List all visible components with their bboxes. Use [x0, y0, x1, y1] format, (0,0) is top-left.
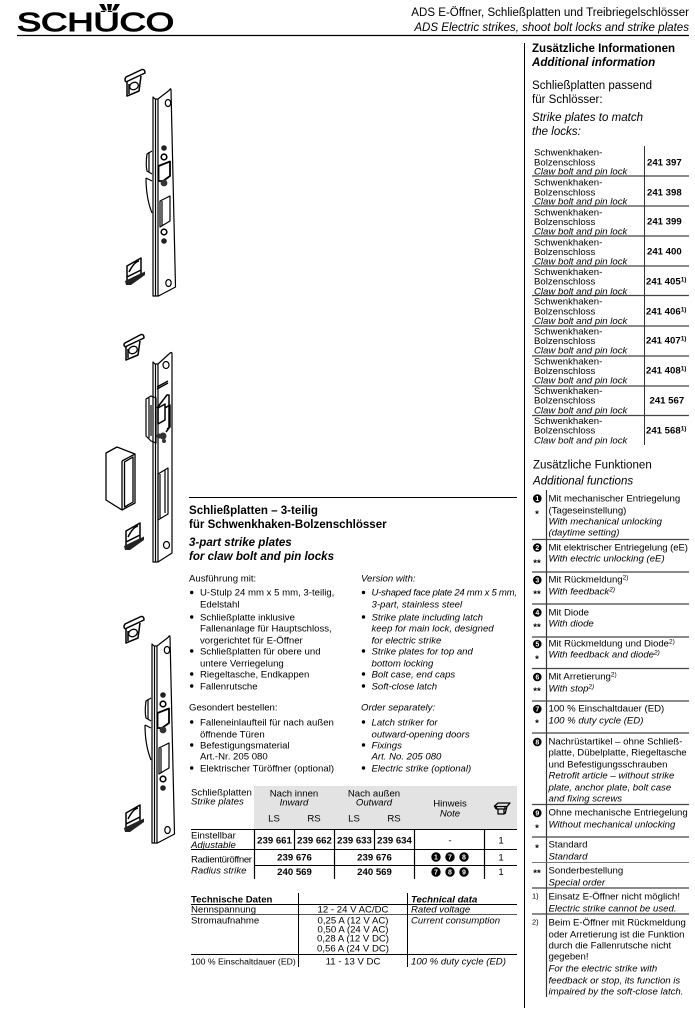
strike plates order table: 240 569 — [277, 867, 312, 878]
strike plates order table: Radius strike — [191, 866, 246, 876]
English version list: Bolt case, end caps — [372, 670, 455, 680]
column divider — [524, 43, 526, 1008]
lock compatibility table: Claw bolt and pin lock — [534, 226, 629, 238]
function 7: 100 % Einschaltdauer (ED) — [548, 704, 664, 714]
strike plates to match heading: Strike plates to match — [532, 112, 643, 124]
lock compatibility table: 241 408 — [646, 366, 681, 376]
illustration: strike plate set with electric strike and bolt case — [106, 334, 172, 562]
English version list: keep for main lock, designed — [372, 624, 494, 634]
lock compatibility table: Schwenkhaken- — [534, 356, 602, 368]
strike plates order table: Einstellbar — [191, 830, 237, 842]
technical data table: 0,50 A (24 V AC) — [318, 924, 388, 936]
German order separately list — [189, 702, 334, 774]
function 5 — [533, 638, 675, 665]
German version list — [189, 574, 334, 692]
lock compatibility table: Schwenkhaken- — [534, 296, 602, 308]
product panel rule — [189, 496, 517, 498]
lock compatibility table: Schwenkhaken- — [534, 178, 602, 188]
lock compatibility table: 241 567 — [650, 396, 684, 406]
Schüco logo: SCHÜCO — [17, 7, 174, 37]
function 3: 2) — [608, 586, 615, 594]
lock compatibility table: 241 568 — [646, 426, 681, 436]
German version list: untere Verriegelung — [200, 658, 284, 670]
lock compatibility table: 241 407 — [646, 336, 681, 346]
function 5: 5 — [535, 642, 539, 648]
function 2: ** — [533, 558, 541, 569]
German order separately list: Elektrischer Türöffner (optional) — [200, 764, 334, 774]
table header: RS — [307, 814, 321, 824]
table header: Note — [440, 808, 460, 820]
additional functions heading: Additional functions — [532, 476, 633, 488]
lock compatibility table: Schwenkhaken- — [534, 208, 602, 218]
table header: Nach innen — [270, 788, 318, 800]
function 6: Mit Arretierung — [548, 672, 611, 682]
lock compatibility table: 241 398 — [647, 188, 682, 198]
German version list: Fallenanlage für Hauptschloss, — [200, 624, 332, 634]
lock compatibility table: 1) — [681, 276, 686, 284]
strike plates to match heading: the locks: — [532, 126, 581, 138]
product heading: 3-part strike plates — [189, 537, 292, 549]
lock compatibility table: Claw bolt and pin lock — [534, 196, 629, 208]
function 3: Mit Rückmeldung — [548, 574, 623, 586]
page title: ADS E-Öffner, Schließplatten und Treibriegelschlösser — [411, 7, 689, 19]
German order separately list: Falleneinlaufteil für nach außen — [200, 718, 334, 728]
English version list: 3-part, stainless steel — [372, 600, 463, 610]
German order separately list: Befestigungsmaterial — [200, 740, 290, 752]
additional information heading: Additional information — [531, 57, 655, 69]
function 8: Retrofit article – without strike — [548, 770, 674, 782]
English order separately list: Electric strike (optional) — [372, 764, 471, 774]
lock compatibility table: 1) — [681, 366, 686, 372]
lock compatibility table: Claw bolt and pin lock — [534, 376, 629, 386]
technical data table: Stromaufnahme — [191, 916, 259, 926]
strike plates order table: 8 — [448, 870, 452, 876]
lock compatibility table: 241 397 — [647, 158, 682, 168]
function 8: Nachrüstartikel – ohne Schließ- — [548, 736, 682, 748]
footnote 2: durch die Fallenrutsche nicht — [548, 940, 671, 952]
footnote 2: impaired by the soft-close latch. — [548, 986, 683, 998]
function 3: ** — [533, 589, 541, 600]
English version list — [361, 574, 517, 692]
lock compatibility table: 241 405 — [646, 276, 681, 288]
technical data table: 100 % Einschaltdauer (ED) — [191, 956, 296, 966]
function 2: With electric unlocking (eE) — [548, 554, 665, 564]
legend: special order: ** — [533, 868, 541, 879]
function 4: Mit Diode — [548, 608, 589, 618]
illustration: strike plate set, adjustable — [125, 69, 176, 296]
footnote 2: For the electric strike with — [548, 964, 657, 974]
English order separately list: Order separately: — [361, 702, 435, 714]
legend: special order: Special order — [548, 878, 606, 888]
technical data table: Technische Daten — [191, 894, 273, 906]
header rule — [17, 34, 689, 36]
function 5: With feedback and diode — [548, 650, 654, 660]
footnote 2: gegeben! — [548, 952, 589, 962]
strike plates order table: 1 — [498, 852, 504, 864]
lock compatibility table: Claw bolt and pin lock — [534, 436, 629, 446]
lock compatibility table — [532, 146, 689, 446]
additional information heading — [531, 43, 675, 69]
product heading: für Schwenkhaken-Bolzenschlösser — [189, 519, 387, 531]
lock compatibility table: Claw bolt and pin lock — [534, 406, 629, 416]
function 2 — [533, 542, 688, 569]
lock compatibility table: Schwenkhaken- — [534, 238, 602, 248]
lock compatibility table: Claw bolt and pin lock — [534, 346, 629, 356]
English version list: Soft-close latch — [372, 682, 437, 692]
strike plates order table: 1 — [498, 867, 504, 878]
function 3: With feedback — [548, 586, 609, 598]
function 1: (Tageseinstellung) — [548, 506, 626, 516]
English order separately list: Fixings — [372, 740, 402, 752]
function 7: * — [535, 718, 539, 729]
strike plates order table: 239 676 — [277, 852, 312, 864]
lock compatibility table: 1) — [681, 336, 686, 342]
function 1: Mit mechanischer Entriegelung — [548, 494, 680, 504]
additional functions list — [532, 490, 689, 998]
strike plates to match heading: für Schlösser: — [532, 94, 603, 106]
lock compatibility table: 241 406 — [646, 306, 681, 318]
function 1: (daytime setting) — [548, 528, 619, 538]
strike plates order table: 239 633 — [337, 836, 372, 846]
technical data table: 100 % duty cycle (ED) — [411, 956, 506, 968]
lock compatibility table: Claw bolt and pin lock — [534, 286, 629, 298]
lock compatibility table: Claw bolt and pin lock — [534, 166, 629, 178]
technical data table: 11 - 13 V DC — [326, 956, 380, 968]
technical data table — [191, 893, 517, 968]
lock compatibility table: Bolzenschloss — [534, 366, 596, 377]
table header: LS — [348, 814, 360, 824]
additional functions heading: Zusätzliche Funktionen — [533, 460, 652, 472]
strike plates order table: 7 — [434, 870, 438, 876]
technical data table: Nennspannung — [191, 904, 256, 916]
table header: Strike plates — [191, 796, 244, 808]
product heading — [189, 505, 387, 563]
strike plates order table: - — [448, 836, 452, 846]
table header: Schließplatten — [191, 788, 252, 798]
product heading: for claw bolt and pin locks — [189, 551, 335, 563]
function 8: plate, anchor plate, bolt case — [548, 782, 671, 794]
strike plates order table: 239 661 — [257, 836, 292, 846]
function 8 — [533, 736, 687, 804]
lock compatibility table: 241 400 — [647, 246, 682, 258]
lock compatibility table: Schwenkhaken- — [534, 386, 602, 397]
function 3 — [533, 574, 628, 600]
technical data table: 0,25 A (12 V AC) — [318, 916, 388, 926]
function 6: With stop — [548, 684, 588, 694]
function 1: 1 — [535, 496, 539, 503]
footnote 1: Einsatz E-Öffner nicht möglich! — [548, 892, 680, 902]
function 9: 9 — [535, 810, 539, 818]
function 7: 100 % duty cycle (ED) — [548, 716, 643, 726]
additional functions heading — [532, 460, 652, 488]
strike plates order table: 9 — [462, 870, 466, 876]
legend: standard: Standard — [548, 840, 587, 850]
function 1: * — [535, 509, 539, 520]
table header: Nach außen — [348, 788, 400, 800]
function 6 — [533, 672, 617, 697]
function 1 — [533, 494, 680, 538]
strike plates order table: 8 — [462, 854, 466, 862]
English version list: Strike plate including latch — [372, 612, 483, 624]
legend: standard: * — [535, 843, 539, 854]
English order separately list: Art. No. 205 080 — [370, 752, 442, 762]
function 8: und Befestigungsschrauben — [548, 760, 667, 770]
additional information heading: Zusätzliche Informationen — [532, 43, 675, 55]
lock compatibility table: Bolzenschloss — [534, 306, 596, 318]
function 4: ** — [533, 622, 541, 633]
German version list: Riegeltasche, Endkappen — [200, 670, 309, 680]
footnote 2: feedback or stop, its function is — [548, 976, 680, 986]
lock compatibility table: Bolzenschloss — [534, 247, 596, 258]
English version list: Strike plates for top and — [372, 646, 473, 658]
strike plates order table: 7 — [448, 854, 452, 862]
German order separately list: Art.-Nr. 205 080 — [200, 752, 268, 762]
English version list: Version with: — [361, 574, 416, 584]
function 5: 2) — [653, 650, 660, 656]
footnote 1 — [532, 892, 680, 914]
German version list: vorgerichtet für E-Öffner — [200, 636, 304, 646]
German order separately list: Gesondert bestellen: — [189, 702, 278, 714]
technical data table: 0,28 A (12 V DC) — [317, 934, 389, 944]
lock compatibility table: Claw bolt and pin lock — [534, 316, 629, 327]
illustration: strike plate set, radius — [124, 616, 174, 843]
function 4: 4 — [535, 610, 539, 617]
English version list: U-shaped face plate 24 mm x 5 mm, — [372, 588, 517, 598]
strike plates to match heading: Schließplatten passend — [532, 80, 652, 92]
table header: RS — [387, 814, 401, 824]
function 4: With diode — [548, 618, 594, 630]
German version list: Fallenrutsche — [200, 682, 258, 692]
Schüco logo — [17, 0, 174, 37]
footnote 1: Electric strike cannot be used. — [548, 904, 676, 914]
lock compatibility table: Claw bolt and pin lock — [534, 256, 629, 268]
footnote 2 — [532, 918, 686, 998]
English version list: bottom locking — [372, 658, 434, 670]
function 1: With mechanical unlocking — [548, 516, 663, 528]
function 9: Ohne mechanische Entriegelung — [548, 808, 688, 818]
strike plates order table: Adjustable — [190, 840, 236, 851]
lock compatibility table: Schwenkhaken- — [534, 416, 602, 427]
English order separately list: Latch striker for — [372, 718, 438, 728]
footnote 2: Beim E-Öffner mit Rückmeldung — [548, 918, 686, 928]
lock compatibility table: Schwenkhaken- — [534, 267, 602, 278]
footnote 1: 1) — [532, 892, 539, 900]
lock compatibility table: Bolzenschloss — [534, 158, 596, 168]
function 5: Mit Rückmeldung und Diode — [548, 638, 669, 650]
German version list: U-Stulp 24 mm x 5 mm, 3-teilig, — [200, 588, 334, 598]
technical data table: 0,56 A (24 V DC) — [317, 944, 389, 954]
German version list: Ausführung mit: — [189, 574, 256, 584]
lock compatibility table: Schwenkhaken- — [534, 148, 602, 158]
strike plates order table: Radientüröffner — [191, 854, 253, 866]
function 2: 2 — [535, 545, 539, 552]
function 8: platte, Dübelplatte, Riegeltasche — [548, 748, 687, 758]
lock compatibility table: Schwenkhaken- — [534, 326, 602, 338]
table header: LS — [268, 814, 280, 824]
function 9 — [533, 808, 688, 834]
lock compatibility table: Bolzenschloss — [534, 217, 596, 228]
legend: special order — [533, 866, 623, 888]
strike plates order table: 1 — [434, 854, 438, 862]
legend: standard: Standard — [548, 852, 588, 862]
footnote 2: 2) — [532, 918, 539, 926]
function 2: Mit elektrischer Entriegelung (eE) — [548, 542, 688, 554]
English order separately list — [361, 702, 471, 774]
technical data table: Technical data — [411, 894, 478, 906]
function 3: 3 — [535, 578, 539, 584]
lock compatibility table: 241 399 — [647, 216, 682, 228]
German version list: Edelstahl — [200, 600, 239, 610]
lock compatibility table: Bolzenschloss — [534, 426, 596, 436]
strike plates order table: 1 — [498, 836, 504, 846]
lock compatibility table: Bolzenschloss — [534, 188, 596, 198]
strike plates to match heading — [532, 80, 652, 138]
German version list: Schließplatte inklusive — [200, 612, 295, 624]
page title — [411, 7, 689, 34]
lock compatibility table: Bolzenschloss — [534, 276, 596, 288]
function 8: 8 — [535, 740, 539, 746]
English version list: for electric strike — [372, 636, 441, 646]
lock compatibility table: Bolzenschloss — [534, 336, 596, 347]
footnote 2: oder Arretierung ist die Funktion — [548, 930, 684, 940]
technical data table: Rated voltage — [411, 904, 470, 916]
function 7: 7 — [535, 706, 539, 714]
German order separately list: öffnende Türen — [200, 730, 265, 740]
English order separately list: outward-opening doors — [372, 730, 470, 740]
table header: Outward — [356, 798, 393, 808]
function 6: 2) — [611, 672, 617, 678]
icon: packaging box — [494, 803, 510, 814]
lock compatibility table: 1) — [681, 426, 686, 432]
strike plates order table: 239 676 — [357, 852, 392, 864]
function 9: Without mechanical unlocking — [548, 820, 676, 830]
function 5: * — [535, 654, 539, 665]
function 5: 2) — [669, 638, 675, 646]
strike plates order table: 239 634 — [377, 836, 412, 846]
function 8: and fixing screws — [548, 794, 622, 804]
function 6: 2) — [587, 684, 594, 690]
strike plates order table: 239 662 — [297, 836, 332, 846]
legend: standard — [535, 840, 588, 862]
strike plates order table: 240 569 — [357, 867, 392, 878]
function 7 — [533, 704, 664, 729]
lock compatibility table: Bolzenschloss — [534, 396, 596, 406]
function 3: 2) — [623, 574, 628, 582]
table header: Hinweis — [433, 798, 467, 810]
function 9: * — [535, 823, 539, 834]
lock compatibility table: 1) — [681, 306, 686, 314]
function 6: 6 — [535, 674, 539, 682]
technical data table: 12 - 24 V AC/DC — [318, 904, 389, 916]
table header: Inward — [280, 798, 309, 808]
function 4 — [533, 608, 594, 633]
legend: special order: Sonderbestellung — [548, 866, 623, 876]
table header — [191, 786, 517, 829]
product heading: Schließplatten – 3-teilig — [189, 505, 318, 517]
strike plates order table — [190, 786, 517, 879]
German version list: Schließplatten für obere und — [200, 646, 321, 658]
technical data table: Current consumption — [411, 916, 500, 926]
page title: ADS Electric strikes, shoot bolt locks and strike plates — [413, 22, 689, 34]
function 6: ** — [533, 686, 541, 697]
